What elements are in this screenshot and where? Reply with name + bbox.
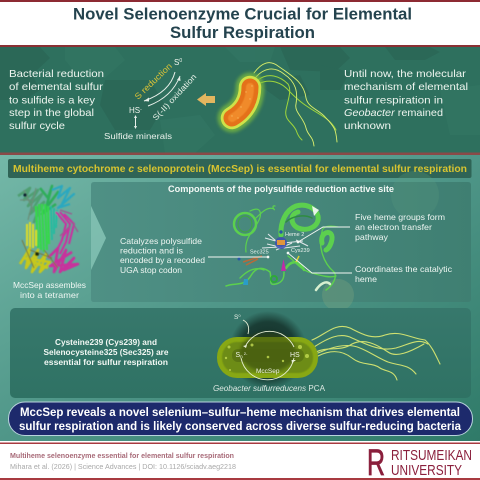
diagram: sulfur cycle: S(-II) oxidation bbox=[151, 72, 198, 122]
text: until now: sulfur respiration in bbox=[344, 94, 443, 106]
text: residues: Cysteine239 (Cys239) and bbox=[55, 337, 157, 347]
text: five heme groups bbox=[355, 212, 445, 242]
figure: active site structure: Sec325 bbox=[250, 250, 269, 256]
citation: Multiheme selenoenzyme essential for elemental sulfur respiration bbox=[10, 451, 234, 460]
panel: essential residues bbox=[10, 308, 471, 398]
figure: geobacter cell bbox=[217, 311, 440, 389]
citation: Mihara et al. (2026) | Science Advances | DOI: 10.1126/sciadv.aeg2218 bbox=[10, 462, 236, 471]
leader lines bbox=[208, 227, 352, 273]
arrow: yellow bbox=[197, 93, 215, 106]
text: coordinates heme bbox=[355, 264, 453, 284]
text: coordinates heme: Coordinates the catalytic bbox=[355, 264, 453, 274]
figure: geobacter cell: MccSep bbox=[256, 368, 280, 375]
panel: sulfur cycle background bbox=[0, 45, 480, 155]
diagram: sulfur cycle: - bbox=[140, 107, 142, 113]
text: residues: Selenocysteine325 (Sec325) are bbox=[44, 347, 169, 357]
heading: mccsep bbox=[8, 159, 472, 178]
panel: active site bbox=[91, 171, 471, 311]
text: catalyzes: Catalyzes polysulfide bbox=[120, 236, 202, 246]
diagram: sulfur cycle: S reduction bbox=[132, 61, 174, 101]
text: residues: essential for sulfur respiration bbox=[44, 357, 168, 367]
text: bacterial reduction: sulfur cycle bbox=[9, 120, 65, 132]
figure: geobacter cell: 0 bbox=[238, 313, 241, 318]
text: bacterial reduction: Bacterial reduction bbox=[9, 68, 104, 80]
title: Novel Selenoenzyme Crucial for Elemental bbox=[73, 6, 412, 24]
figure: geobacter cell: HS bbox=[290, 352, 300, 359]
text: five heme groups: an electron transfer bbox=[355, 222, 432, 232]
text: bacterial reduction: of elemental sulfur bbox=[9, 81, 104, 93]
text: catalyzes: encoded by a recoded bbox=[120, 255, 205, 265]
caption: geobacter: Geobacter sulfurreducens PCA bbox=[213, 384, 326, 393]
footer bbox=[0, 441, 480, 480]
text: bacterial reduction bbox=[9, 68, 104, 132]
citation bbox=[10, 451, 236, 471]
icon: bacterium bbox=[231, 63, 337, 146]
figure: tetramer protein bbox=[18, 186, 78, 272]
logo: ritsumeikan university bbox=[367, 442, 472, 480]
text: residues bbox=[44, 337, 169, 367]
logo: ritsumeikan university: UNIVERSITY bbox=[391, 462, 462, 479]
figure: geobacter cell: S bbox=[234, 314, 238, 321]
diagram: sulfur cycle: 0 bbox=[179, 58, 182, 64]
text: catalyzes: reduction and is bbox=[120, 246, 183, 256]
text: until now: Geobacter remained bbox=[344, 107, 443, 119]
figure: active site structure: Cys239 bbox=[291, 248, 310, 254]
text: five heme groups: Five heme groups form bbox=[355, 212, 445, 222]
figure: active site structure: Heme 2 bbox=[285, 232, 304, 238]
text: five heme groups: pathway bbox=[355, 232, 389, 242]
diagram: sulfur cycle: HS bbox=[129, 106, 140, 115]
heading: mccsep: Multiheme cytochrome c selenoprotein (MccSep) is essential for elemental sulfur respiration bbox=[13, 164, 467, 175]
text: bacterial reduction: to sulfide is a key bbox=[9, 94, 96, 106]
text: catalyzes bbox=[120, 236, 205, 275]
title: Sulfur Respiration bbox=[170, 24, 315, 42]
text: until now: mechanism of elemental bbox=[344, 81, 468, 93]
caption: tetramer bbox=[13, 280, 86, 300]
text: bacterial reduction: step in the global bbox=[9, 107, 94, 119]
text: until now bbox=[344, 68, 468, 132]
diagram: sulfur cycle: Sulfide minerals bbox=[104, 132, 172, 141]
heading: active site: Components of the polysulfide reduction active site bbox=[168, 184, 394, 195]
text: catalyzes: UGA stop codon bbox=[120, 265, 182, 275]
caption: tetramer: MccSep assembles bbox=[13, 280, 86, 290]
figure: geobacter cell: S bbox=[236, 352, 240, 359]
figure: active site structure bbox=[226, 205, 338, 290]
title bbox=[73, 6, 412, 42]
callout: conclusion bbox=[8, 402, 472, 436]
figure: geobacter cell: 2- bbox=[243, 351, 248, 356]
diagram: sulfur cycle: S bbox=[174, 58, 179, 67]
diagram: sulfur cycle bbox=[104, 58, 198, 141]
callout: conclusion: MccSep reveals a novel selenium–sulfur–heme mechanism that drives elemental bbox=[20, 407, 460, 419]
text: until now: Until now, the molecular bbox=[344, 68, 467, 80]
caption: tetramer: into a tetramer bbox=[20, 290, 79, 300]
text: until now: unknown bbox=[344, 120, 391, 132]
text: coordinates heme: heme bbox=[355, 274, 377, 284]
panel: mccsep background bbox=[0, 155, 480, 443]
figure: geobacter cell: n bbox=[240, 354, 243, 359]
callout: conclusion: sulfur respiration and is likely conserved across diverse sulfur-reducing bacteria bbox=[19, 421, 462, 433]
